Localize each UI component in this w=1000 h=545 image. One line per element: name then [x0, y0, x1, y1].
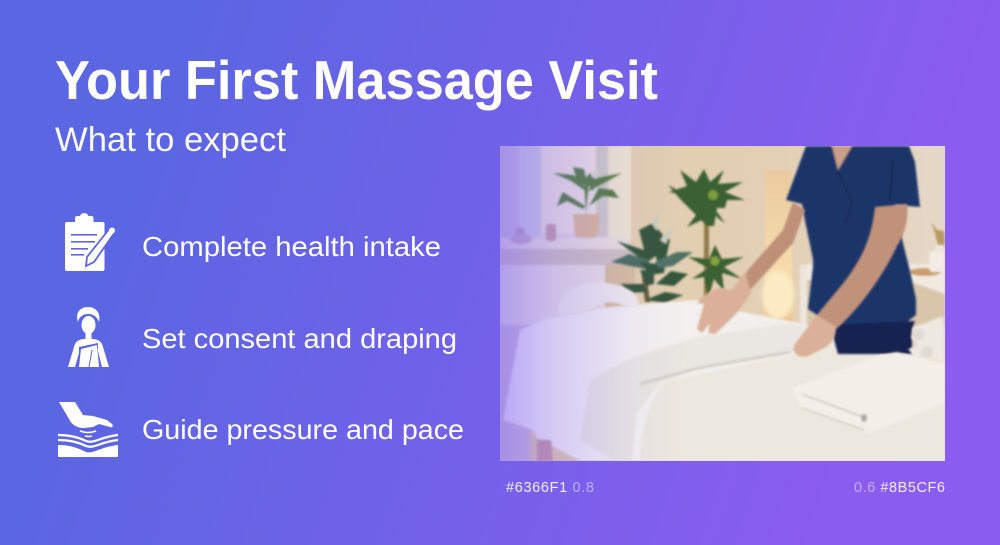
- tall plant: [668, 169, 745, 299]
- caption: end colour: 0.6 #8B5CF6: [854, 480, 945, 496]
- caption: start colour: #6366F1 0.8: [506, 480, 594, 496]
- title: Your First Massage Visit: [55, 49, 658, 111]
- step text: Set consent and draping: [142, 323, 457, 354]
- photo: therapist preparing a massage table: [500, 146, 945, 461]
- wall: [500, 146, 945, 461]
- plant on sill: [553, 167, 622, 214]
- left arm and hand: [697, 202, 805, 334]
- table leg: [537, 440, 553, 461]
- step text: Complete health intake: [142, 231, 441, 262]
- scrubs: [786, 146, 920, 354]
- folded towel: [793, 352, 945, 433]
- purple left fade over photo: [500, 146, 640, 461]
- right arm and hand: [793, 204, 908, 357]
- icon: hand pressing layered surface: [58, 402, 118, 457]
- window: [500, 146, 635, 461]
- short plant: [611, 211, 693, 303]
- step 3: guide pressure and pace: [58, 402, 464, 457]
- subtitle: What to expect: [55, 121, 287, 159]
- icon: person in towel: [68, 307, 109, 367]
- window sill objects: [510, 214, 600, 244]
- icon: clipboard with pencil: [65, 213, 115, 271]
- towel runner: [580, 324, 804, 460]
- side shelf: [800, 222, 945, 330]
- step 2: set consent and draping: [68, 307, 457, 367]
- floor lamp: [765, 170, 792, 325]
- massage table sheet: [503, 300, 945, 461]
- face cradle: [558, 283, 639, 316]
- rolled towels: [908, 316, 945, 362]
- step text: Guide pressure and pace: [142, 414, 464, 445]
- step 1: complete health intake: [65, 213, 441, 271]
